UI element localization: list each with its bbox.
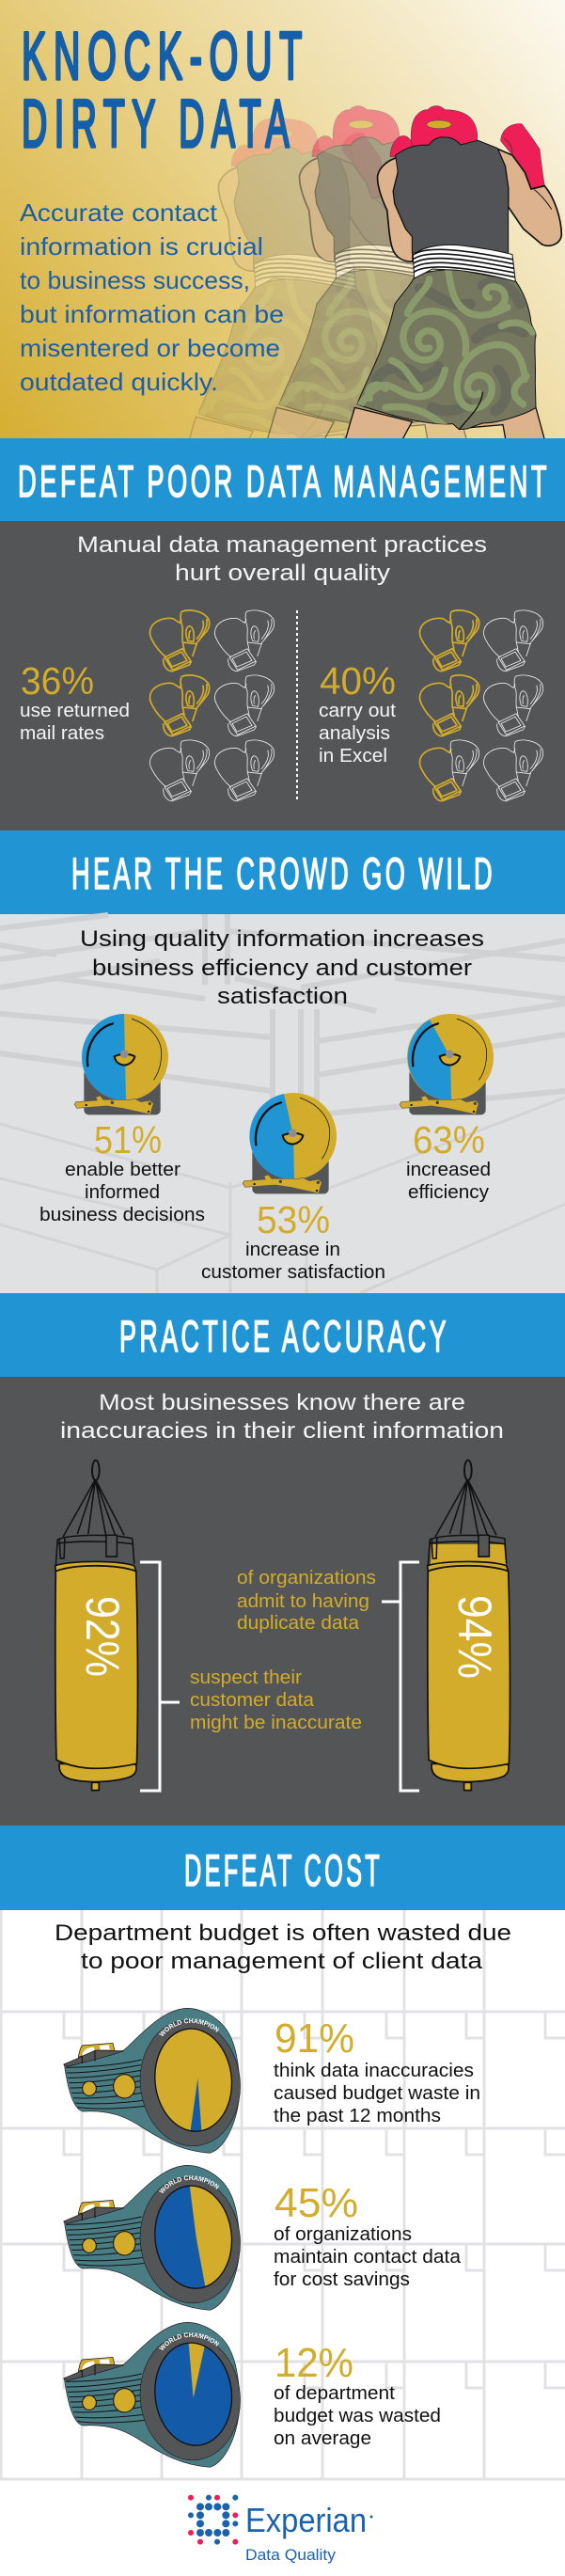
panel heading [60,1390,504,1444]
intro text: Accurate contact [20,198,218,227]
gloves: 40% [419,610,543,801]
stat: 40%: analysis [319,723,390,744]
intro text: information is crucial [20,232,263,261]
stat: 51%: enable better [65,1160,180,1180]
callout: 94%: duplicate data [237,1613,360,1634]
stat: 63%: efficiency [408,1182,489,1203]
callout: 94%: admit to having [237,1591,369,1612]
panel heading [55,1920,511,1974]
stat: 45%: 45% [275,2180,358,2226]
panel heading: business efficiency and customer [92,956,472,981]
panel heading: Most businesses know there are [99,1390,465,1415]
bracket: 94% [382,1562,419,1791]
belt: 45% [64,2165,246,2310]
panel heading: hurt overall quality [175,561,390,586]
callout: 94%: of organizations [237,1568,376,1588]
stat: 12%: budget was wasted [274,2406,441,2426]
stat: 91% [274,2015,480,2126]
intro text: but information can be [20,300,284,328]
panel: crowd [0,914,565,1293]
stat: 12%: on average [274,2428,371,2449]
panel: hero [0,0,565,451]
panel heading [77,532,487,586]
stat: 91%: the past 12 months [274,2106,441,2126]
punching bag: 94% [428,1461,510,1791]
heading: defeat cost: DEFEAT COST [184,1845,383,1895]
stat: 36%: mail rates [20,723,104,744]
stat: 63%: 63% [413,1118,485,1162]
stat: 53%: increase in [245,1240,340,1260]
belt: 91% [64,2008,246,2153]
stat: 51% [39,1118,205,1225]
panel: accuracy [0,1377,565,1825]
icon: dot grid [188,2495,238,2545]
gloves: 36% [149,610,275,801]
bracket: 92% [140,1562,180,1791]
stat: 53% [201,1198,385,1283]
panel heading: satisfaction [217,984,348,1009]
stat: 91%: think data inaccuracies [274,2061,474,2081]
stat: 40%: in Excel [319,746,387,766]
stat: 12% [274,2340,441,2449]
callout: 92%: might be inaccurate [190,1713,362,1733]
stat: 63%: increased [406,1160,491,1180]
callout: 92%: customer data [190,1690,315,1711]
panel: cost [0,1910,565,2481]
heading: defeat cost [0,1825,565,1910]
panel heading: Using quality information increases [80,926,484,952]
callout: 92% [190,1667,362,1733]
stat: 36%: 36% [21,659,94,703]
stat: 12%: 12% [275,2340,353,2386]
panel heading: Manual data management practices [77,532,487,558]
logo: Experian Data Quality [188,2495,372,2564]
stat: 45%: of organizations [274,2224,412,2245]
panel heading: to poor management of client data [81,1949,483,1974]
callout: 92%: suspect their [190,1667,302,1688]
stat: 45% [274,2180,462,2290]
stat: 45%: maintain contact data [274,2247,462,2268]
illustration: boxer with motion ghosts [186,106,561,451]
logo: Experian Data Quality: Experian [245,2501,367,2539]
stat: 91%: 91% [275,2015,354,2062]
stat: 63% [406,1118,491,1203]
icon: hard drive 63% [400,1014,494,1114]
stat: 53%: customer satisfaction [201,1262,385,1283]
stat: 40% [319,659,396,766]
heading: defeat poor data management [0,438,565,521]
stat: 53%: 53% [257,1198,330,1241]
icon: hard drive 53% [243,1093,337,1193]
title: DIRTY DATA [22,87,296,162]
title [22,20,309,162]
callout: 94% [237,1568,376,1634]
panel heading [80,926,484,1009]
stat: 51%: 51% [94,1118,162,1162]
belt: 12% [64,2322,246,2467]
stat: 12%: of department [274,2383,395,2404]
intro text: outdated quickly. [20,368,218,396]
intro text [20,198,284,396]
stat: 45%: for cost savings [274,2269,410,2290]
stat: 51%: informed [85,1182,160,1203]
stat: 36%: use returned [20,701,130,721]
stat: 40%: carry out [319,701,396,721]
stat: 36% [20,659,130,744]
panel heading: inaccuracies in their client information [60,1418,504,1444]
punching bag: 94%: 94% [448,1595,501,1679]
stat: 51%: business decisions [39,1205,205,1225]
stat: 91%: caused budget waste in [274,2083,480,2104]
panel: poor data management [0,521,565,830]
title: KNOCK-OUT [22,20,309,94]
icon: hard drive 51% [74,1014,168,1114]
punching bag: 92% [55,1461,137,1791]
logo: Experian Data Quality: Data Quality [245,2546,337,2564]
intro text: to business success, [20,266,250,294]
panel heading: Department budget is often wasted due [55,1920,511,1946]
stat: 40%: 40% [320,659,396,703]
punching bag: 92%: 92% [76,1596,129,1677]
intro text: misentered or become [20,334,280,362]
heading: practice accuracy [0,1293,565,1377]
heading: hear the crowd go wild [0,830,565,914]
